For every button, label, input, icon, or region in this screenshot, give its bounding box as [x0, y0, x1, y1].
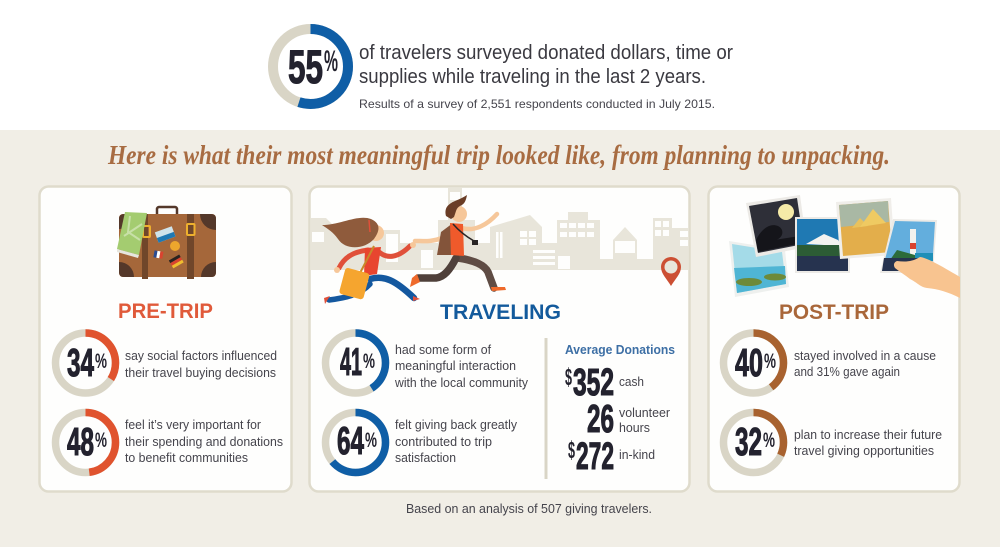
- panel: post-trip: [708, 186, 960, 492]
- illustration: travel photos and hand: [729, 195, 960, 298]
- stat: 64%: %: [365, 429, 377, 452]
- stat: 41%: %: [363, 350, 375, 373]
- stat: 41%: with the local community: [394, 375, 528, 390]
- stat: 34%: their travel buying decisions: [125, 365, 276, 380]
- panel: traveling: [310, 186, 690, 492]
- photo: sea: [729, 241, 789, 297]
- stat: 40%: [724, 333, 936, 393]
- donation: volunteer hours: 26: [587, 398, 614, 441]
- stat: 64%: felt giving back greatly: [395, 417, 517, 432]
- survey note: Results of a survey of 2,551 respondents conducted in July 2015.: [359, 97, 715, 111]
- stat: 34%: 34: [67, 342, 94, 385]
- donation: in-kind: $: [568, 437, 575, 464]
- photo: lighthouse: [880, 219, 937, 273]
- stat: 32%: [724, 412, 942, 472]
- stat: 48%: [56, 412, 283, 472]
- stat: 32%: 32: [735, 421, 762, 464]
- stat: 32%: travel giving opportunities: [794, 443, 934, 458]
- stat: 41%: 41: [340, 341, 362, 384]
- icon: suitcase: [117, 207, 216, 279]
- stat: 48%: to benefit communities: [125, 450, 248, 465]
- donut: 55%: [273, 29, 348, 104]
- top statistic: 55% of travelers: [273, 29, 733, 111]
- donut: 55%: 55: [288, 40, 323, 93]
- photo: night sky: [746, 195, 807, 257]
- icon: location pin: [661, 257, 681, 286]
- subheading: average donations: Average Donations: [565, 342, 675, 357]
- stat: 34%: [56, 333, 277, 393]
- stat: 34%: %: [95, 350, 107, 373]
- stat: 40%: 40: [735, 342, 763, 385]
- donation: cash: $: [565, 364, 572, 391]
- heading: post-trip: POST-TRIP: [779, 301, 889, 324]
- stat: 40%: %: [764, 350, 776, 373]
- stat: 64%: [326, 412, 517, 472]
- donation: cash: cash: [619, 374, 644, 389]
- heading: traveling: TRAVELING: [440, 301, 561, 324]
- footnote: Based on an analysis of 507 giving travelers.: [406, 501, 652, 516]
- stat: 32%: %: [763, 429, 775, 452]
- donation: cash: 352: [573, 362, 614, 404]
- photo: mountain: [795, 217, 850, 273]
- city skyline: [311, 188, 688, 270]
- average donations: [565, 342, 675, 478]
- stat: 41%: had some form of: [395, 342, 491, 357]
- stat: 34%: say social factors influenced: [125, 348, 277, 363]
- headline statistic text: of travelers surveyed donated dollars, time or: [359, 42, 733, 64]
- panel: pre-trip: [40, 186, 292, 492]
- donation: in-kind: in-kind: [619, 447, 655, 462]
- stat: 48%: their spending and donations: [125, 434, 283, 449]
- photo: desert pyramids: [836, 198, 895, 259]
- stat: 32%: plan to increase their future: [794, 427, 942, 442]
- headline statistic text: [359, 42, 733, 88]
- stat: 48%: feel it’s very important for: [125, 417, 262, 432]
- headline statistic text: supplies while traveling in the last 2 years.: [359, 66, 706, 88]
- illustration: woman running: [322, 218, 420, 304]
- stat: 48%: %: [95, 429, 107, 452]
- donation: in-kind: 272: [576, 436, 614, 478]
- icon: pointing hand: [894, 257, 960, 298]
- stat: 40%: and 31% gave again: [794, 364, 900, 379]
- donation: volunteer hours: [587, 398, 671, 441]
- stat: 64%: contributed to trip: [395, 434, 492, 449]
- donation: volunteer hours: hours: [619, 420, 650, 435]
- stat: 64%: 64: [337, 420, 364, 463]
- stat: 40%: stayed involved in a cause: [794, 348, 936, 363]
- stat: 41%: [326, 333, 528, 393]
- donation: volunteer hours: volunteer: [619, 405, 671, 420]
- heading: pre-trip: PRE-TRIP: [118, 300, 213, 323]
- illustration: man running: [410, 195, 506, 291]
- donut: 55%: %: [324, 45, 338, 78]
- stat: 64%: satisfaction: [395, 450, 456, 465]
- section heading: Here is what their most meaningful trip looked like, from planning to unpacking.: [107, 140, 890, 170]
- stat: 48%: 48: [67, 421, 94, 464]
- stat: 41%: meaningful interaction: [395, 358, 516, 373]
